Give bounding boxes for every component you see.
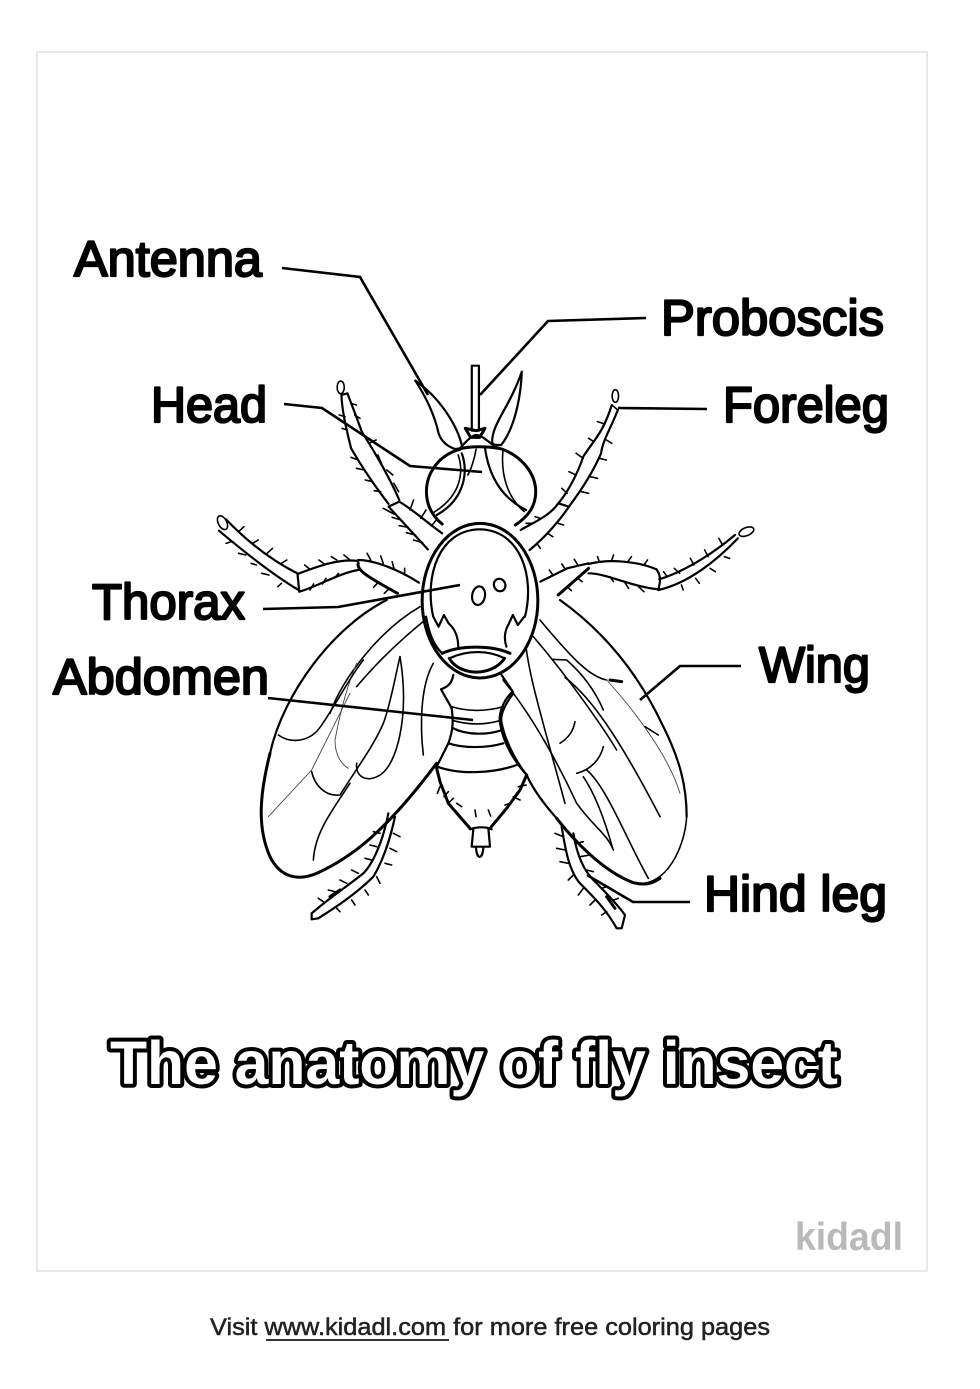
leader line: thorax — [263, 585, 460, 609]
label: Abdomen: Abdomen — [53, 649, 269, 705]
thorax — [422, 523, 538, 678]
label: Foreleg: Foreleg — [723, 377, 889, 433]
left foreleg — [337, 381, 442, 549]
fly illustration — [215, 366, 755, 928]
leader line: abdomen — [268, 698, 473, 720]
leader line: wing — [640, 666, 741, 700]
wings and abdomen — [261, 600, 687, 928]
left middle leg — [215, 514, 419, 593]
leader line: antenna — [282, 268, 428, 395]
label: Thorax: Thorax — [92, 574, 245, 630]
left antenna — [415, 381, 462, 449]
left hind leg — [312, 813, 400, 919]
leader line: foreleg — [618, 408, 707, 409]
leader line: proboscis — [480, 318, 646, 395]
title: The anatomy of fly insect — [110, 1029, 838, 1097]
label: Head: Head — [151, 377, 267, 433]
head, thorax and legs — [215, 366, 755, 678]
leader line: hind leg — [587, 875, 690, 902]
label: Proboscis: Proboscis — [661, 290, 884, 346]
label: Hind leg: Hind leg — [704, 866, 887, 922]
label: Wing: Wing — [759, 637, 870, 693]
label: Antenna: Antenna — [74, 231, 262, 287]
right hind leg — [555, 827, 625, 928]
footer text: Visit www.kidadl.com for more free coloring pages — [210, 1314, 770, 1341]
head — [426, 447, 536, 525]
right middle leg — [540, 525, 755, 595]
left wing — [261, 600, 437, 877]
abdomen — [437, 675, 527, 857]
proboscis — [460, 366, 496, 448]
watermark: kidadl logo: kidadl — [795, 1216, 903, 1259]
right foreleg — [521, 390, 619, 550]
right antenna — [492, 372, 522, 445]
leader line: head — [284, 404, 482, 472]
page border — [37, 52, 927, 1271]
right wing — [501, 600, 687, 884]
